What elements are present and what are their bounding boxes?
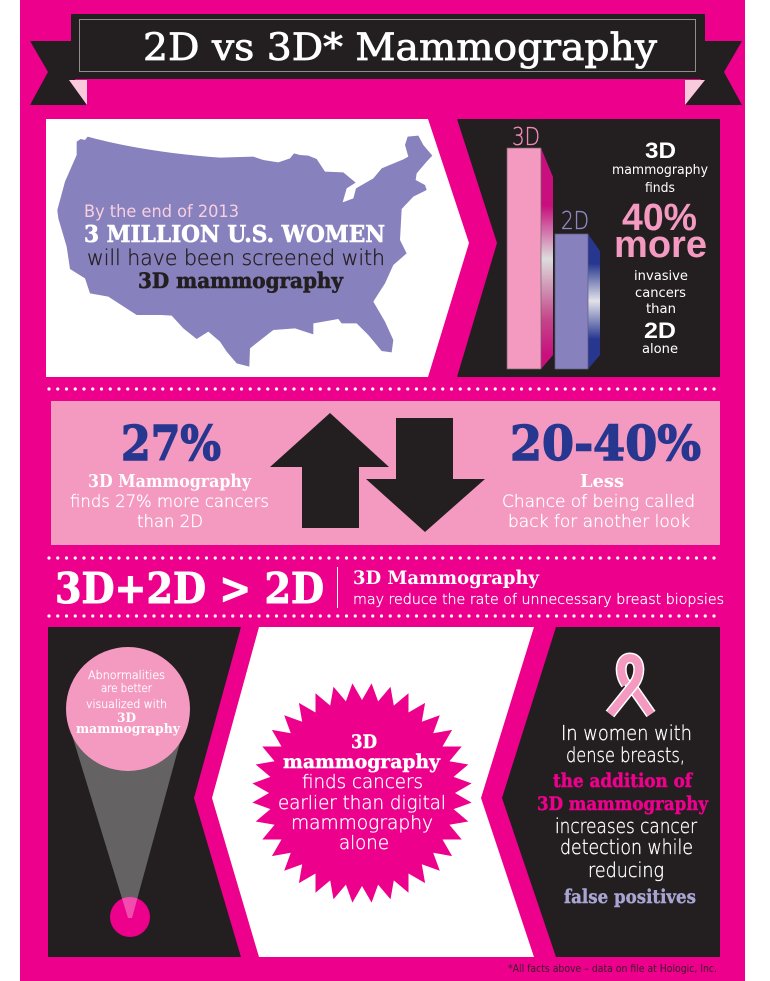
stat: 20-40% less callbacks: back for another look [508,512,690,532]
stat: 20-40% less callbacks: Less [580,471,624,492]
large pink circle [66,647,190,771]
panel: finds cancers earlier [212,627,534,957]
panel: 40% more bar chart [457,119,720,377]
spotlight text: 3D [117,711,136,726]
biopsy text [353,567,724,608]
title banner [30,14,742,105]
2D bar [555,234,588,369]
banner right tail [685,41,742,105]
panel text: 3D [645,138,676,163]
3D bar label: 3D [512,122,540,151]
biopsy statement [55,564,724,613]
panel text [612,138,708,357]
map text: By the end of 2013 [84,202,239,222]
panel background [46,119,469,377]
starburst text: alone [339,832,389,854]
spotlight text: Abnormalities [88,668,165,682]
3D bar side [541,148,553,369]
stat: 27% more cancers: 3D Mammography [88,471,251,492]
starburst text: finds cancers [302,771,423,793]
dense breasts text: dense breasts, [566,743,685,767]
dense breasts text: the addition of [553,770,694,792]
3D+2D > 2D heading: 3D+2D > 2D [55,564,324,613]
starburst text: earlier than digital [278,792,446,814]
dense breasts text: detection while [560,835,693,859]
starburst text: mammography [291,812,433,834]
starburst text [278,731,446,854]
stat: 27% more cancers: than 2D [137,512,203,532]
banner inner border [80,20,696,72]
stat: 27% more cancers: 27% [121,416,221,472]
panel: abnormalities spotlight [48,627,241,957]
panel background [502,627,720,957]
dense breasts text: increases cancer [555,814,698,838]
title: 2D vs 3D* Mammography [143,26,657,69]
3D bar [507,148,541,369]
spotlight text: are better [101,681,152,695]
small magenta circle [110,897,150,937]
panel background [51,401,720,545]
starburst text: 3D [351,731,377,753]
panel text: 2D [644,318,676,343]
panel text: finds [645,181,675,196]
icon: up arrow [270,413,389,528]
banner left tail [30,41,87,105]
divider [337,567,338,608]
footnote: *All facts above – data on file at Hologic, Inc. [508,963,717,975]
map text: 3 MILLION U.S. WOMEN [84,221,385,248]
banner body [71,14,705,79]
starburst text: mammography [283,751,441,773]
bar chart [507,122,600,369]
dense breasts text: 3D mammography [537,793,709,815]
banner right fold [685,80,705,105]
panel text: than [646,302,676,317]
stat: 27% more cancers [70,416,269,532]
panel: 27% and 20-40% stats [51,401,720,545]
spotlight text [76,668,180,737]
dense breasts text: false positives [564,886,696,908]
map text: will have been screened with [87,246,385,270]
panel text: 40% [622,197,697,239]
starburst [252,683,472,903]
panel text: alone [642,342,678,357]
dense breasts text [537,721,709,908]
stat: 27% more cancers: finds 27% more cancers [70,492,269,512]
panel: dense breasts [502,627,720,957]
panel text: cancers [635,286,686,301]
spotlight cone [72,735,182,918]
2D bar side [588,234,600,369]
stat: 20-40% less callbacks: Chance of being called [502,492,695,512]
panel text: more [614,224,707,266]
dense breasts text: reducing [588,858,664,882]
biopsy text: may reduce the rate of unnecessary breast biopsies [353,592,724,608]
dense breasts text: In women with [561,721,692,745]
spotlight text: visualized with [86,697,167,711]
panel: US map [46,119,469,377]
spotlight text: mammography [76,722,180,737]
panel background [48,627,241,957]
2D bar label: 2D [561,206,589,235]
map of the United States [57,136,432,367]
panel background [212,627,534,957]
icon: down arrow [366,418,485,532]
stat: 20-40% less callbacks [502,416,701,532]
panel text: invasive [634,269,688,284]
biopsy text: 3D Mammography [353,567,540,589]
icon: pink ribbon [610,658,651,714]
panel text: mammography [612,163,708,178]
banner left fold [69,80,87,105]
map text [84,202,385,293]
map text: 3D mammography [138,268,344,293]
panel background [457,119,720,377]
stat: 20-40% less callbacks: 20-40% [510,416,701,472]
